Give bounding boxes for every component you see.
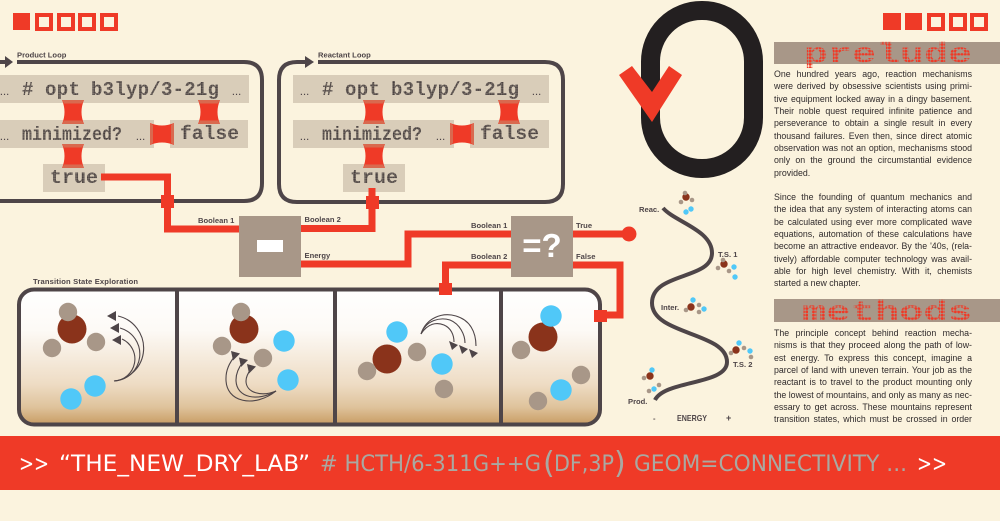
command box: true: true (50, 167, 98, 189)
banner command text: DF,3P (554, 452, 614, 477)
panel: reactant loop (279, 50, 563, 202)
chart labels: T.S. 2 (733, 360, 752, 369)
heading: methods: methods (802, 298, 972, 329)
text block: prelude paragraph 2: Since the founding of quantum mechanics and (774, 192, 972, 202)
equality test operator (511, 216, 573, 277)
text block: prelude paragraph 2 (774, 192, 972, 288)
text block: methods: essary to get across. These mountains represent (774, 402, 972, 412)
text block: prelude paragraph 2: become an attractive endeavor. By the '40s, (rela- (774, 241, 972, 251)
chart labels (628, 205, 752, 423)
text block: methods (774, 328, 972, 424)
banner command text: >> (19, 452, 49, 477)
command box: false (170, 120, 248, 148)
molecule: transition state 1 (716, 258, 738, 280)
command box: minimized: ... (135, 134, 146, 143)
text block: prelude paragraph 2: be calculated using ever more complicated wave (774, 217, 972, 227)
command box: opt: ... (231, 89, 242, 98)
frame 3 arrows (421, 315, 478, 358)
text block: prelude paragraph 2: the idea that any system of interacting atoms can (774, 204, 972, 214)
command box: false (470, 120, 549, 148)
command box: opt: opt (345, 79, 380, 101)
chart labels: Prod. (628, 397, 647, 406)
dividers (177, 290, 501, 424)
command box: opt (293, 75, 549, 103)
frame 1 arrows (107, 311, 144, 381)
command box: opt (0, 75, 249, 103)
frame 4 molecules (512, 305, 590, 410)
text block: methods: the lowest of mountains, and only as many as nec- (774, 390, 972, 400)
wire labels: Boolean 2 (471, 252, 507, 261)
text block: prelude paragraph 2: started a new chapter. (774, 278, 861, 288)
panel: transition state exploration (19, 277, 600, 424)
heading: prelude (774, 40, 1000, 71)
wire labels: False (576, 252, 595, 261)
label: product loop: Product Loop (17, 50, 67, 60)
banner command text: >> (917, 452, 947, 477)
command box: minimized (293, 120, 454, 148)
command box: true: true (350, 167, 398, 189)
bottom banner (0, 436, 1000, 490)
command box: opt: b3lyp/3-21g (91, 79, 219, 101)
text block: methods: reactant is to travel to the product mounting only (774, 377, 972, 387)
text block: prelude paragraph 1: One hundred years ago, reaction mechanisms (774, 69, 972, 79)
label: reactant loop: Reactant Loop (318, 50, 371, 60)
command box: minimized: ... (299, 134, 310, 143)
banner command text: ( (543, 446, 555, 481)
command box: minimized: minimized? (22, 124, 122, 146)
heading: prelude: prelude (804, 40, 972, 71)
text block: prelude paragraph 1: Their noble quest required infinite patience and (774, 106, 972, 116)
command box: opt: # (322, 79, 333, 101)
text block: prelude paragraph 1: perseverance to obtain a single result in every (774, 118, 972, 128)
command box: minimized: minimized? (322, 124, 422, 146)
label: transition state exploration: Transition State Exploration (33, 277, 138, 286)
text block: prelude paragraph 1: were derived by obsessive scientists using primi- (774, 81, 972, 91)
subtract operator (239, 216, 301, 277)
command box: minimized: ... (435, 134, 446, 143)
wire labels: Boolean 1 (198, 216, 235, 225)
text block: prelude paragraph 1 (774, 69, 972, 178)
text block: prelude paragraph 2: tively) affordable computer technology was avail- (774, 254, 972, 264)
chart labels: + (726, 413, 731, 423)
progress squares: left (13, 13, 116, 30)
command box: opt: opt (45, 79, 80, 101)
command box: true (343, 164, 405, 192)
molecule: product (642, 367, 661, 393)
wire labels: Energy (304, 251, 331, 260)
heading: methods (774, 298, 1000, 329)
text block: prelude paragraph 1: tive equipment locked away in a dingy basement. (774, 94, 972, 104)
connectors: product loop (62, 100, 220, 168)
text block: prelude paragraph 1: observation was not an option, mechanisms stood (774, 143, 972, 153)
chart labels: T.S. 1 (718, 250, 738, 259)
chart labels: ENERGY (677, 413, 707, 423)
banner command text: GEOM=CONNECTIVITY ... (634, 452, 907, 477)
banner command text: # HCTH/6-311G++G (320, 452, 541, 477)
text block: methods: est energy. To express this concept, imagine a (774, 353, 972, 363)
text block: prelude paragraph 2: equations, automation of these calculations have (774, 229, 972, 239)
text block: methods: parcel of land with uneven terrain. Your job as the (774, 365, 972, 375)
command box: opt: ... (299, 89, 310, 98)
frame 2 molecules (213, 303, 299, 391)
text block: prelude paragraph 1: thousand failures. Even then, since direct atomic (774, 131, 972, 141)
banner command text: ) (614, 446, 626, 481)
molecule: intermediate (684, 297, 707, 314)
command box: minimized (0, 120, 154, 148)
command box: opt: b3lyp/3-21g (391, 79, 519, 101)
text block: methods: The principle concept behind reaction mecha- (774, 328, 972, 338)
text block: prelude paragraph 1: only on the ground the circumstantial evidence (774, 155, 972, 165)
wire labels: True (576, 221, 592, 230)
big zero numeral (650, 10, 754, 168)
molecule: transition state 2 (729, 340, 753, 359)
wire labels (198, 215, 595, 261)
progress squares: right (883, 13, 986, 30)
wires (101, 177, 636, 322)
banner command text: “THE_NEW_DRY_LAB” (59, 452, 310, 477)
chart labels: Inter. (661, 303, 679, 312)
wire labels: Boolean 1 (471, 221, 508, 230)
chart labels: Reac. (639, 205, 659, 214)
connectors: reactant loop (363, 100, 520, 168)
text block: methods: transition states, which must be crossed in order (774, 414, 972, 424)
text block: methods: nisms is that they proceed along the path of low- (774, 340, 972, 350)
banner command text (19, 446, 947, 481)
frame 2 arrows (226, 351, 276, 401)
equality test operator: =? (522, 227, 562, 264)
molecule: reactant (679, 191, 694, 215)
text block: prelude paragraph 1: provided. (774, 168, 810, 178)
command box: true (43, 164, 105, 192)
frame 3 molecules (358, 321, 453, 398)
command box: opt: # (22, 79, 33, 101)
panel: product loop (0, 50, 262, 201)
frame 1 molecules (43, 303, 106, 410)
text block: prelude paragraph 2: able for high level chemistry. With it, chemists (774, 266, 972, 276)
energy profile chart (628, 191, 753, 423)
wire labels: Boolean 2 (304, 215, 341, 224)
chart labels: - (653, 414, 656, 423)
command box: opt: ... (531, 89, 542, 98)
command box: false: false (480, 123, 539, 145)
red check mark (619, 66, 682, 122)
command box: false: false (180, 123, 239, 145)
